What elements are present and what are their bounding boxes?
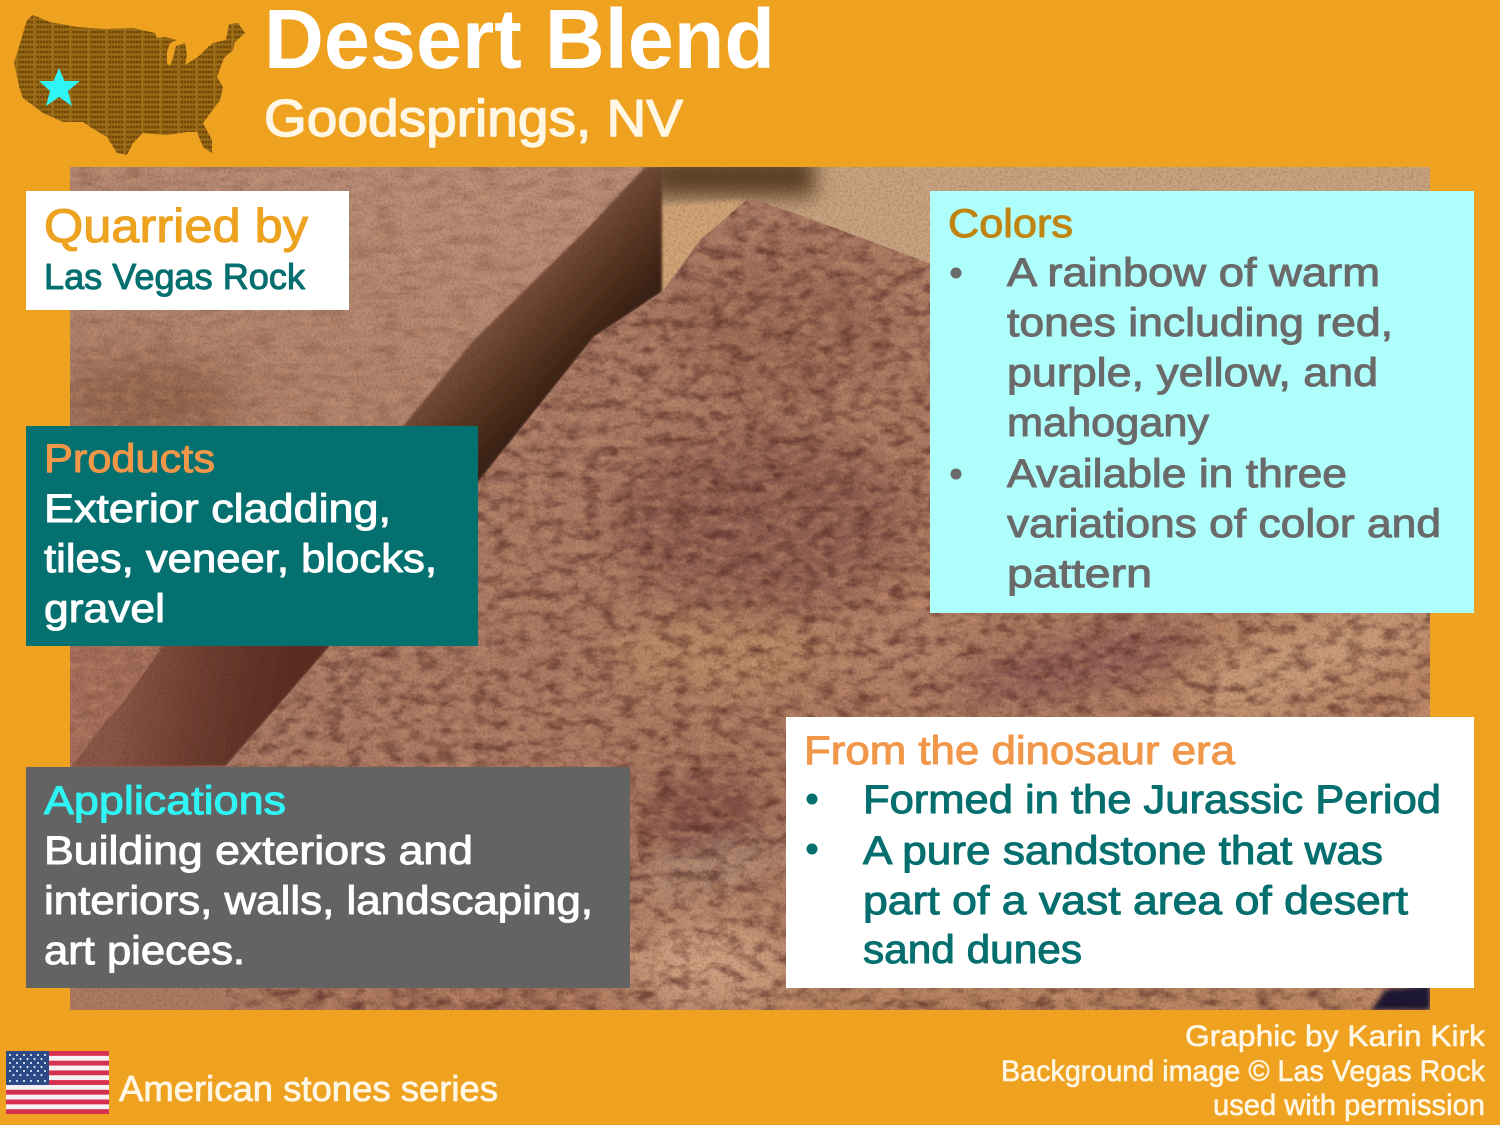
heading: quarried by: Quarried by <box>44 199 309 252</box>
heading: dinosaur era: From the dinosaur era <box>804 729 1236 773</box>
credits: Background image © Las Vegas Rock <box>1001 1055 1486 1088</box>
heading: colors: Colors <box>948 202 1073 246</box>
text: product list: tiles, veneer, blocks, <box>44 537 437 581</box>
bullet list: dinosaur era <box>806 778 1441 972</box>
text: application list: Building exteriors and <box>44 829 473 873</box>
bullet list: colors: variations of color and <box>1007 502 1441 546</box>
bullet list: colors: A rainbow of warm <box>1007 251 1380 295</box>
panel: from the dinosaur era <box>786 717 1474 988</box>
series label: American stones series <box>119 1068 498 1109</box>
icon: US map with location star <box>14 15 245 155</box>
text: product list: gravel <box>44 587 165 631</box>
bullet list: colors: pattern <box>1007 552 1152 596</box>
text: product list <box>44 487 437 631</box>
credits: used with permission <box>1213 1089 1485 1122</box>
bullet list: dinosaur era: sand dunes <box>863 928 1082 972</box>
heading: applications: Applications <box>44 779 286 823</box>
credits: Graphic by Karin Kirk <box>1185 1020 1486 1053</box>
map of the United States <box>14 15 245 155</box>
text: quarrier name: Las Vegas Rock <box>44 256 306 297</box>
panel: applications <box>26 767 630 988</box>
credits <box>1001 1020 1486 1122</box>
bullet list: colors: mahogany <box>1007 401 1209 445</box>
background photo: sandstone blocks <box>60 155 1445 1019</box>
bullet list: colors: Available in three <box>1007 452 1347 496</box>
text: application list: art pieces. <box>44 929 245 973</box>
text: application list: interiors, walls, landscaping, <box>44 879 593 923</box>
star: Nevada location <box>39 68 80 106</box>
heading: products: Products <box>44 437 215 481</box>
bullet list: dinosaur era: A pure sandstone that was <box>863 829 1383 873</box>
text: application list <box>44 829 593 973</box>
panel: colors <box>930 191 1474 613</box>
bullet list: dinosaur era: Formed in the Jurassic Period <box>863 778 1441 822</box>
icon: American flag <box>6 1051 109 1114</box>
panel: quarried by <box>26 191 349 310</box>
bullet list: dinosaur era: part of a vast area of desert <box>863 879 1408 923</box>
bullet list: colors <box>950 251 1441 596</box>
text: product list: Exterior cladding, <box>44 487 391 531</box>
subtitle: Goodsprings, NV <box>264 90 683 148</box>
bullet list: colors: tones including red, <box>1007 301 1393 345</box>
bullet list: colors: purple, yellow, and <box>1007 351 1378 395</box>
panel: products <box>26 426 478 646</box>
